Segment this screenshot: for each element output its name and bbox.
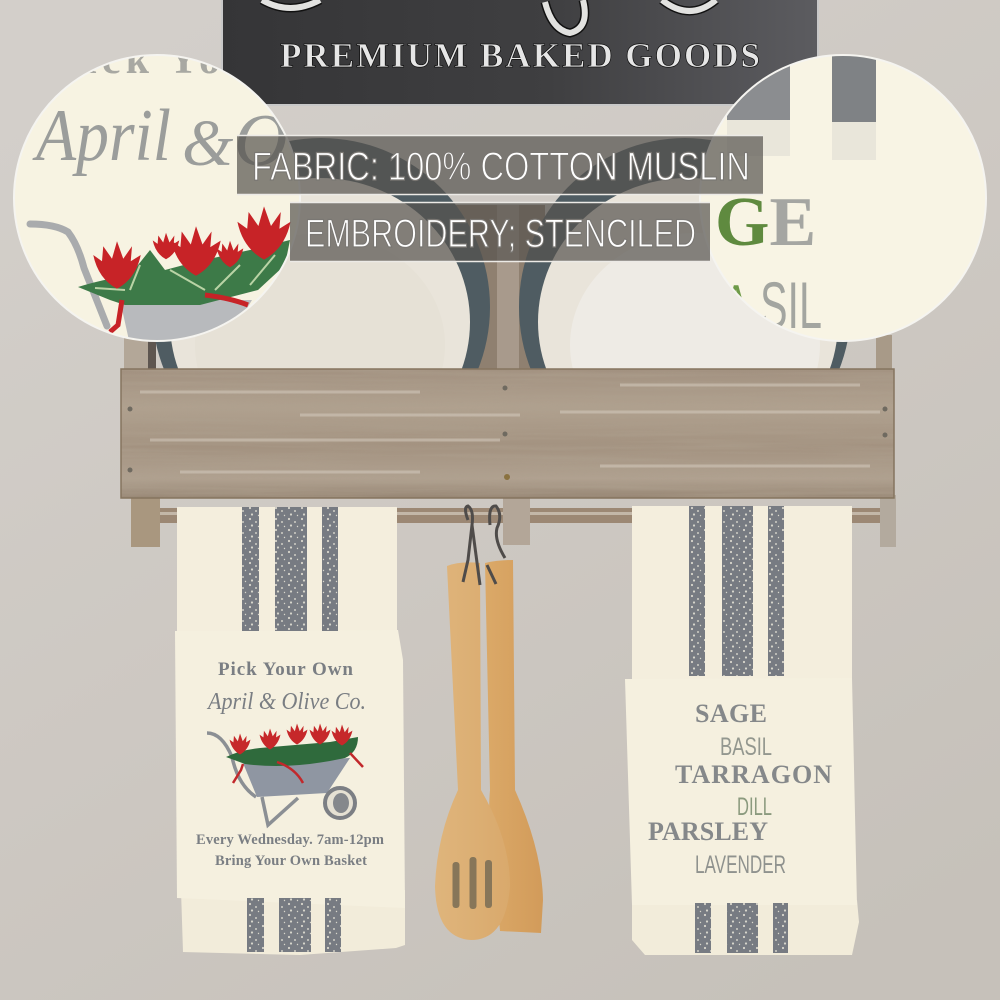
spatula: [485, 560, 543, 933]
slotted spoon: [435, 562, 510, 940]
hooks: [463, 506, 505, 585]
sign: premium baked goods: PREMIUM BAKED GOODS: [280, 36, 760, 75]
icon: wheelbarrow: [207, 724, 363, 825]
right detail circle: [700, 55, 986, 342]
herb list text: DILL: [737, 793, 772, 821]
herb list text: [648, 699, 832, 879]
stripes: bottom: [695, 903, 788, 953]
label: fabric: FABRIC: 100% COTTON MUSLIN: [252, 145, 750, 189]
label: embroidery: EMBROIDERY; STENCILED: [305, 212, 696, 256]
right detail circle: SIL: [760, 268, 822, 342]
towel text: April & Olive Co.: [206, 689, 366, 715]
shelf back posts: [124, 205, 892, 370]
stripes: top: [242, 507, 338, 631]
sign: premium baked goods: [222, 0, 818, 105]
left detail circle: O: [234, 100, 287, 182]
plates: [152, 138, 851, 476]
herb list text: PARSLEY: [648, 817, 768, 846]
lower shelf supports: [131, 495, 896, 547]
wooden shelf board: [121, 369, 894, 498]
herb list text: TARRAGON: [675, 760, 832, 789]
right towel: [625, 506, 859, 955]
right detail circle: A: [722, 273, 750, 342]
left detail circle: [14, 37, 300, 345]
stripes: top: [689, 506, 784, 676]
herb list text: SAGE: [695, 699, 767, 728]
left towel: [175, 507, 405, 955]
label: embroidery: [290, 202, 710, 262]
herb list text: LAVENDER: [695, 851, 786, 879]
towel text: [196, 659, 384, 869]
left detail circle: ick Yo: [85, 37, 220, 83]
label: fabric: [237, 136, 763, 194]
towel text: Every Wednesday. 7am-12pm: [196, 832, 384, 848]
herb list text: BASIL: [720, 733, 772, 761]
towel text: Bring Your Own Basket: [215, 853, 367, 869]
towel text: Pick Your Own: [218, 659, 353, 680]
right detail circle: GE: [715, 184, 816, 261]
left detail circle: April: [32, 95, 171, 177]
stripes: bottom: [247, 898, 341, 952]
left detail circle: &: [182, 107, 234, 180]
